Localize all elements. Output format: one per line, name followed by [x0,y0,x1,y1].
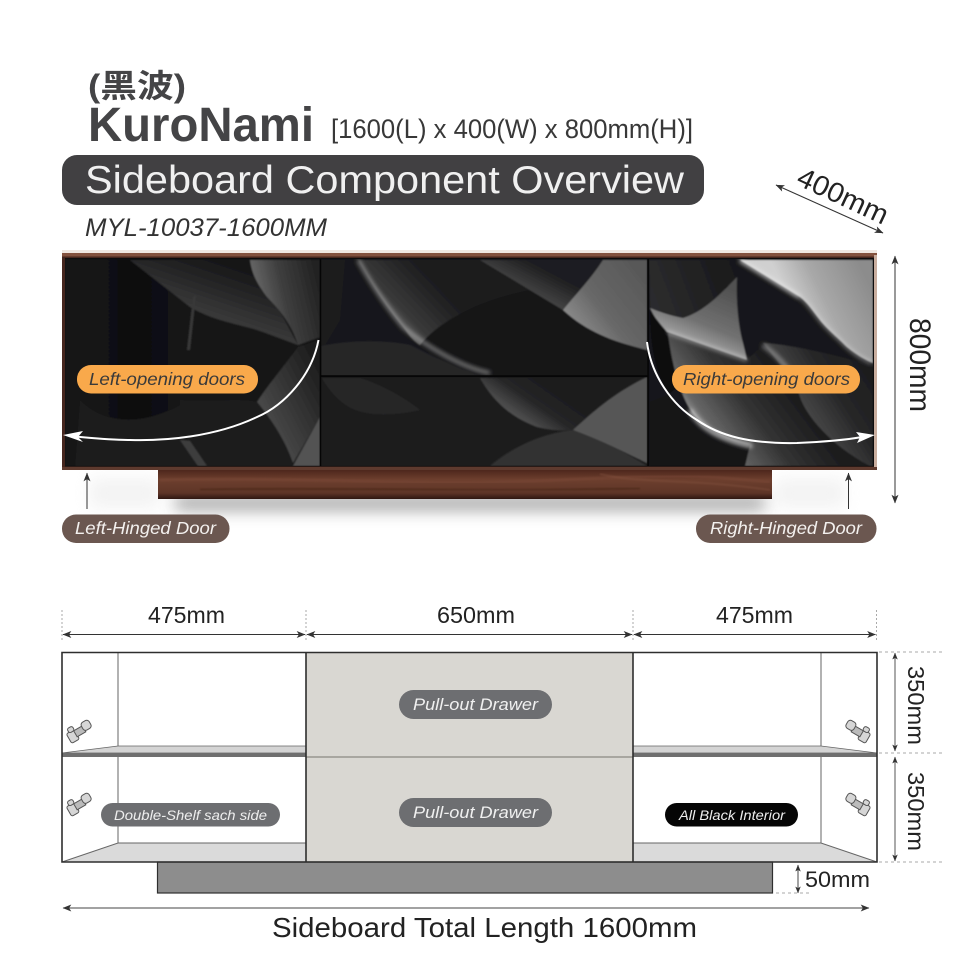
dimension: plinth height: 50mm [805,867,870,892]
arrow: left hinge pointer [86,473,88,509]
sideboard product photo [62,250,877,510]
walnut plinth base [158,469,772,499]
label: left-hinged door [62,514,230,543]
label: pull-out drawer bottom: Pull-out Drawer [413,803,539,822]
left compartments [62,653,306,862]
icon: hinge upper right [843,717,873,743]
panel art: centre top drawer [321,259,648,376]
arrow: right door swing [647,342,875,443]
dimension: top widths: 650mm [437,602,515,628]
callout: left-opening doors [77,365,258,394]
arrow: right hinge pointer [848,473,850,509]
icon: hinge lower left [64,790,94,816]
callout: right-opening doors: Right-opening doors [683,369,850,389]
dimension: compartment heights [879,652,945,862]
label: pull-out drawer top [399,690,552,719]
icon: hinge upper left [64,717,94,743]
dimension: top widths: 475mm [148,602,225,628]
dimension: compartment heights: 350mm [903,772,929,851]
panel seams [320,259,648,466]
dimension: compartment heights: 350mm [903,666,929,745]
label: left-hinged door: Left-Hinged Door [75,518,217,538]
plinth [158,862,772,893]
label: double-shelf: Double-Shelf sach side [114,807,267,823]
callout: left-opening doors: Left-opening doors [89,369,245,389]
dimension: plinth height [776,865,870,893]
label: all black interior: All Black Interior [678,807,786,823]
panel art: right door [649,259,873,466]
label: pull-out drawer bottom [399,798,552,827]
centre drawers [306,653,633,862]
label: all black interior [665,803,798,826]
depth dimension 400mm: 400mm [792,161,893,230]
arrow: left door swing [63,340,318,442]
floor shadow [90,478,845,510]
label: right-hinged door [696,514,876,543]
panel art: left door [65,259,320,466]
model number: MYL-10037-1600MM [85,214,327,242]
door and drawer fronts [65,258,874,466]
line diagram: sideboard interior [62,652,877,893]
right compartments [633,653,877,862]
height dimension 800mm: 800mm [903,318,936,412]
panel art: centre bottom drawer [321,377,648,466]
title: Japanese name: (黑波) [88,68,186,104]
icon: hinge lower right [843,790,873,816]
dimension: total length: Sideboard Total Length 1600mm [272,912,697,943]
cabinet frame [62,254,877,470]
label: right-hinged door: Right-Hinged Door [710,518,863,538]
label: double-shelf [101,803,280,826]
dimension: top widths [62,602,876,642]
dimension: top widths: 475mm [716,602,793,628]
title: KuroNami: KuroNami [88,99,314,152]
label: pull-out drawer top: Pull-out Drawer [413,695,539,714]
callout: right-opening doors [672,365,860,394]
heading banner: Sideboard Component Overview [85,159,685,202]
overall dimensions: [1600(L) x 400(W) x 800mm(H)] [331,114,693,144]
cabinet outline [62,652,877,862]
